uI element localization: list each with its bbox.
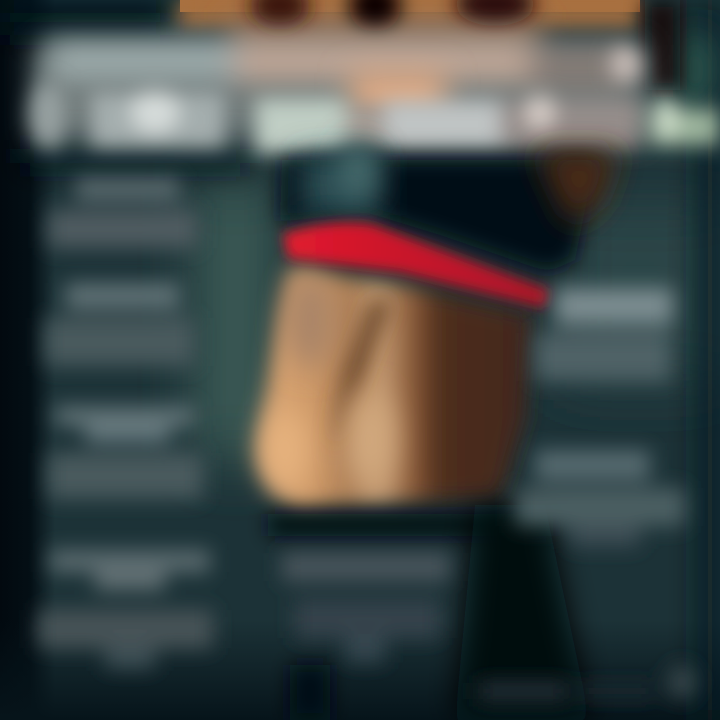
left column: text block 2: [45, 283, 195, 366]
red waistband: [283, 222, 550, 308]
left column: text block 1: [48, 178, 198, 248]
right column: text block 2: [515, 450, 685, 546]
title underlay: [35, 45, 645, 140]
title: first line highlight: [610, 46, 640, 82]
title: first line: [48, 40, 630, 90]
title: second line: [30, 81, 720, 153]
right column: text block 1: [535, 288, 673, 381]
left column: text block 3: [48, 406, 203, 499]
bare midriff: [258, 268, 532, 508]
dark leggings: [268, 505, 590, 720]
dark crop top: [280, 140, 620, 272]
torso skin between title lines: [350, 72, 445, 117]
left column: text block 4: [38, 550, 213, 668]
raised arms and hands: [178, 0, 680, 90]
centre column: text block: [282, 553, 450, 662]
footer text: [478, 664, 697, 700]
